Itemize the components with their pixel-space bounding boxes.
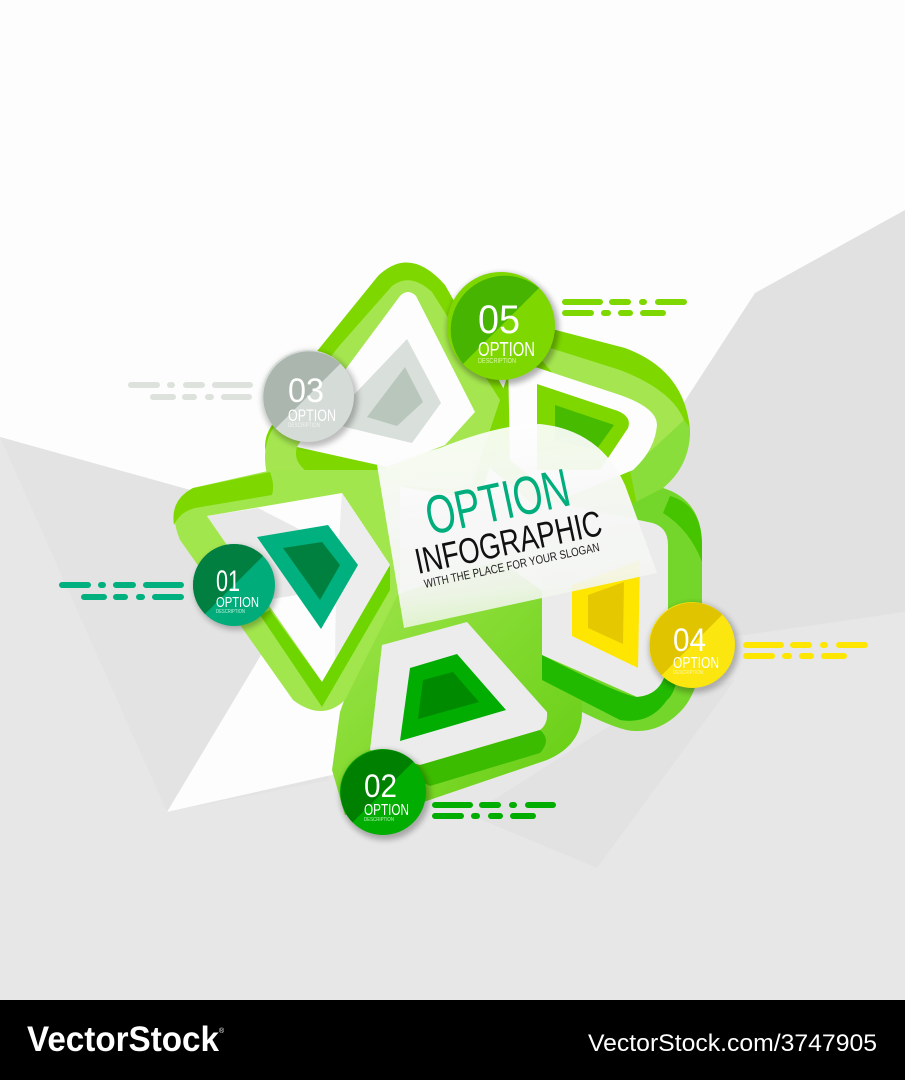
white inner 05 — [508, 358, 657, 500]
V band 01 — [260, 565, 390, 707]
glass card — [377, 424, 657, 628]
badge 02: DESCRIPTION — [364, 817, 394, 823]
badge 04 — [649, 602, 739, 693]
icon: 02 trapezoid — [400, 654, 506, 741]
white inner 03 — [297, 292, 475, 467]
badge 05: 05 — [478, 298, 520, 342]
icon: 01 diamond — [257, 525, 358, 629]
badge 03: OPTION — [288, 406, 336, 425]
badge 04: DESCRIPTION — [673, 670, 703, 676]
shadow — [470, 680, 735, 868]
white inner 02 — [370, 622, 547, 765]
badge 03: 03 — [288, 372, 324, 410]
image id: VectorStock.com/3747905 — [588, 1030, 877, 1057]
badge 02: OPTION — [364, 802, 409, 819]
panel: 02 outer — [332, 560, 582, 815]
icon: 03 diamond — [330, 339, 441, 443]
dashes 04 — [746, 645, 865, 656]
slogan: WITH THE PLACE FOR YOUR SLOGAN — [423, 540, 601, 591]
registered mark: ® — [219, 1027, 225, 1035]
heading: INFOGRAPHIC: INFOGRAPHIC — [411, 502, 606, 582]
badge 03: DESCRIPTION — [288, 423, 320, 429]
brand name: VectorStock — [27, 1020, 220, 1059]
badge 05: DESCRIPTION — [478, 358, 516, 365]
badge 01: OPTION — [216, 594, 259, 611]
badge 01: 01 — [216, 565, 240, 598]
badge 02 — [340, 749, 430, 840]
badge 03 — [262, 350, 358, 447]
badge 05: OPTION — [478, 339, 535, 361]
badge 04: 04 — [673, 622, 706, 658]
panel: 05 outer — [480, 322, 690, 560]
icon: 05 diamond — [537, 384, 629, 470]
dashes 01 — [62, 585, 181, 597]
badge 01: DESCRIPTION — [216, 609, 245, 615]
footer bar — [0, 1000, 905, 1080]
title: OPTION: OPTION — [420, 458, 575, 547]
dashes 03 — [131, 385, 250, 397]
panel: 01 outer — [175, 470, 400, 711]
white inner 01 — [207, 493, 390, 682]
green shape cluster — [173, 262, 702, 815]
badge 01 — [193, 544, 278, 630]
panel: 04 outer — [582, 488, 702, 731]
badge 02: 02 — [364, 768, 397, 804]
dashes 02 — [435, 805, 553, 816]
dashes 05 — [565, 302, 684, 313]
white inner 04 — [542, 500, 668, 697]
badge 04: OPTION — [673, 655, 719, 672]
badge 05 — [447, 272, 559, 385]
panel: 03 outer — [265, 262, 510, 500]
icon: 04 yellow diamond — [572, 560, 640, 668]
